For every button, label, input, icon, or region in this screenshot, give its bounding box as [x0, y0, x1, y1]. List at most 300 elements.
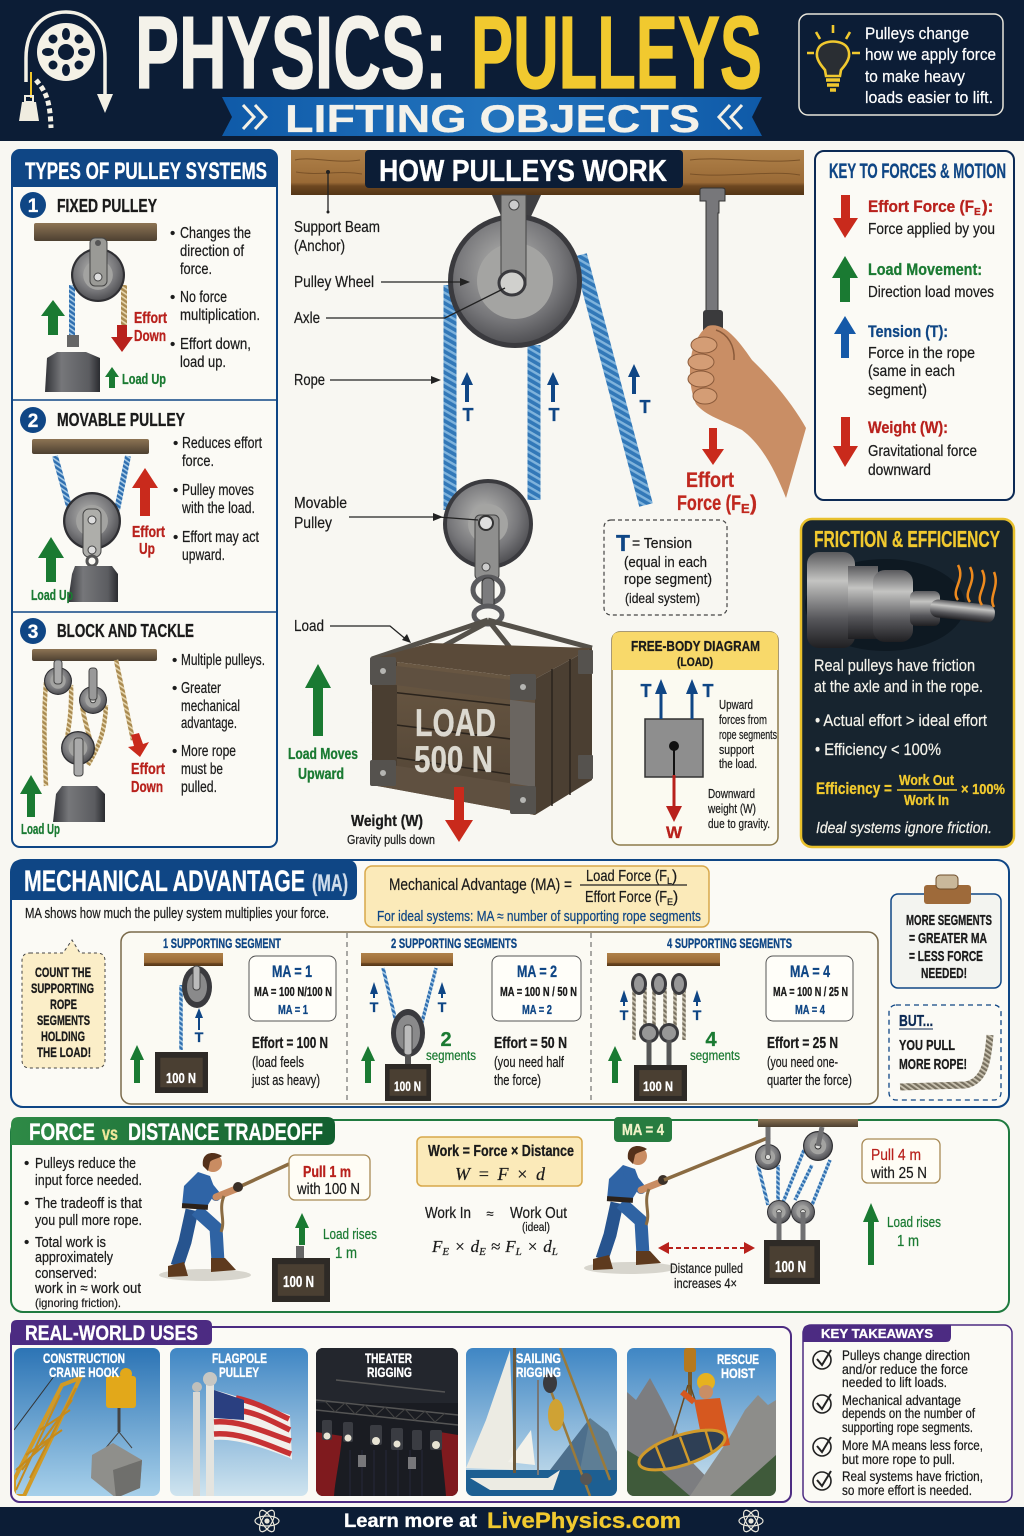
takeaway 1: needed to lift loads. [842, 1375, 947, 1390]
work in equals work out: Work In [425, 1205, 471, 1222]
efficiency formula [816, 772, 1005, 809]
work in equals work out: × [527, 1237, 538, 1256]
callout: pulleys change force: how we apply force [865, 45, 996, 64]
bullet list: work in ≈ work out [34, 1280, 142, 1297]
distance arrow: Distance pulled [670, 1261, 743, 1276]
bullet list: approximately [35, 1249, 113, 1266]
count callout: ROPE [50, 996, 77, 1012]
crate load: LOAD [415, 702, 496, 745]
photo: theater rigging [316, 1348, 458, 1496]
tension note [604, 520, 727, 615]
icon: atom left [255, 1508, 279, 1534]
example: 2 supporting segments: T [370, 999, 379, 1015]
effort force [677, 428, 757, 516]
pull 1 m callout: with 100 N [296, 1181, 360, 1198]
footer text: LivePhysics.com [487, 1508, 681, 1533]
example: 4 supporting segments: Effort = 25 N [767, 1035, 838, 1052]
photo: construction crane: CRANE HOOK [49, 1364, 119, 1380]
fixed pulley: Effort down, [180, 336, 251, 353]
free-body diagram: rope segments [719, 728, 777, 742]
example: 1 supporting segment: MA = 1 [272, 962, 312, 981]
example: 1 supporting segment: 100 N [166, 1070, 196, 1087]
block and tackle: More rope [181, 743, 236, 760]
pulley wheel [448, 195, 582, 348]
takeaway 4: so more effort is needed. [842, 1483, 972, 1498]
formula box: ) [673, 889, 678, 906]
free-body diagram: Downward [708, 787, 755, 801]
labels with leader lines [294, 170, 505, 643]
free-body diagram: weight (W) [707, 802, 756, 816]
example: 2 supporting segments [361, 935, 581, 1101]
work in equals work out [425, 1205, 567, 1258]
footer text: Learn more at [344, 1511, 478, 1532]
work in equals work out: ≈ [486, 1206, 494, 1221]
tension key: (same in each [868, 363, 955, 380]
work in equals work out: F [432, 1237, 442, 1256]
heading: how pulleys work: HOW PULLEYS WORK [379, 153, 668, 188]
heading: force vs distance [11, 1117, 335, 1146]
photo: theater rigging: THEATER [365, 1350, 412, 1366]
fixed pulley: multiplication. [180, 307, 260, 324]
hand pulling handle [688, 188, 806, 498]
load moves upward: Upward [298, 766, 344, 783]
effort force key: Force applied by you [868, 221, 995, 238]
heading: mechanical advantage: MECHANICAL ADVANTAGE [24, 865, 305, 898]
load rises 1 m: Load rises [323, 1226, 377, 1243]
example: 2 supporting segments: 2 SUPPORTING SEGMENTS [391, 935, 517, 951]
block and tackle: 3 [28, 622, 38, 643]
work in equals work out: L [515, 1246, 522, 1258]
example: 4 supporting segments: MA = 4 [790, 962, 830, 981]
free-body diagram: T [702, 681, 714, 701]
block and tackle: • [172, 680, 177, 697]
fixed pulley: Down [134, 328, 166, 345]
distance arrow [658, 1242, 755, 1291]
example: 1 supporting segment: MA = 1 [278, 1002, 308, 1017]
labels with leader lines: Pulley Wheel [294, 274, 374, 291]
block and tackle [20, 618, 265, 838]
fixed pulley: Changes the [180, 225, 251, 242]
photo: sailing rigging [466, 1348, 617, 1496]
load movement key: Direction load moves [868, 284, 994, 301]
movable pulley: • [173, 435, 178, 452]
example: 2 supporting segments: (you need half [494, 1055, 565, 1071]
formula box: Effort Force (F [585, 889, 667, 906]
takeaway 1: and/or reduce the force [842, 1362, 968, 1377]
tension note: T [616, 530, 630, 556]
man pulling block and tackle: 100 N [775, 1259, 806, 1276]
formula box: Load Force (F [586, 868, 667, 885]
photo: flagpole: PULLEY [219, 1364, 259, 1380]
fixed pulley [20, 192, 260, 392]
count callout: HOLDING [41, 1028, 85, 1044]
fixed pulley: force. [180, 261, 212, 278]
footer text [344, 1508, 681, 1533]
example: 4 supporting segments: segments [690, 1048, 740, 1063]
tension note: (ideal system) [625, 590, 700, 606]
bullet list: • [24, 1234, 29, 1251]
example: 1 supporting segment: (load feels [252, 1055, 304, 1071]
example: 2 supporting segments: Effort = 50 N [494, 1035, 567, 1052]
free-body diagram: support [719, 743, 754, 757]
work in equals work out: d [471, 1237, 480, 1256]
panel: friction and efficiency: Real pulleys have friction [814, 656, 975, 675]
work in equals work out: E [441, 1246, 449, 1258]
efficiency formula: Work In [904, 792, 949, 809]
photo: flagpole [170, 1348, 308, 1496]
photo: sailing rigging: SAILING [516, 1350, 561, 1366]
effort force: E [741, 501, 750, 516]
load rises right [863, 1203, 941, 1265]
block and tackle: Multiple pulleys. [181, 652, 265, 669]
panel: mechanical advantage [11, 860, 1009, 1107]
formula box [365, 866, 709, 927]
example: 1 supporting segment: MA = 100 N/100 N [254, 984, 332, 999]
heading: force vs distance: vs [102, 1124, 118, 1145]
tag: MA = 4 [614, 1117, 672, 1142]
example: 4 supporting segments: 4 SUPPORTING SEGMENTS [667, 935, 792, 951]
note: but you pull more rope: BUT... [899, 1013, 933, 1030]
count callout [22, 940, 105, 1068]
support beam [291, 150, 804, 195]
man pulling rope: 1 m [159, 1153, 289, 1281]
effort force key [833, 195, 995, 238]
efficiency formula: Work Out [899, 772, 954, 789]
example: 4 supporting segments: (you need one- [767, 1055, 838, 1071]
example: 2 supporting segments: MA = 2 [522, 1002, 552, 1017]
tension key: segment) [868, 382, 927, 399]
count callout: THE LOAD! [37, 1044, 91, 1060]
example: 4 supporting segments: MA = 100 N / 25 N [773, 984, 848, 999]
formula box: E [667, 897, 673, 907]
photo: construction crane [14, 1348, 160, 1498]
pull 4 m callout: with 25 N [870, 1165, 927, 1182]
callout: pulleys change force: to make heavy [865, 67, 965, 86]
icon: light bulb [807, 25, 860, 90]
callout: pulleys change force: loads easier to lift. [865, 88, 993, 107]
formula box: Mechanical Advantage (MA) = [389, 876, 572, 894]
movable pulley: Pulley moves [182, 482, 254, 499]
movable pulley: force. [182, 453, 214, 470]
example: 2 supporting segments: T [438, 999, 447, 1015]
efficiency formula: × 100% [961, 781, 1005, 798]
free-body diagram: Upward [719, 698, 753, 712]
example: 2 supporting segments: 2 [440, 1029, 452, 1051]
takeaway 3: but more rope to pull. [842, 1452, 955, 1467]
callout: pulleys change force [799, 14, 1003, 115]
free-body diagram: (LOAD) [677, 655, 713, 669]
pull 4 m callout [862, 1139, 940, 1183]
load moves upward [288, 664, 358, 783]
block and tackle: BLOCK AND TACKLE [57, 621, 194, 641]
free-body diagram: T [640, 681, 652, 701]
photo: flagpole: FLAGPOLE [212, 1350, 267, 1366]
heading: real-world uses: REAL-WORLD USES [25, 1322, 198, 1345]
work in equals work out: ≈ [491, 1237, 500, 1256]
effort force: Effort [686, 469, 734, 492]
load rises 1 m [272, 1213, 377, 1302]
fixed pulley: • [170, 336, 175, 353]
block and tackle: mechanical [181, 698, 240, 715]
clipboard note: = LESS FORCE [909, 949, 983, 965]
movable pulley [443, 479, 533, 624]
pull 1 m callout: Pull 1 m [303, 1164, 351, 1181]
labels with leader lines: Movable [294, 495, 347, 512]
bullet list: The tradeoff is that [35, 1195, 143, 1212]
subtitle ribbon [222, 97, 762, 141]
bullet list: • [24, 1155, 29, 1172]
bullet list: Pulleys reduce the [35, 1155, 136, 1172]
example: 2 supporting segments: 100 N [394, 1078, 421, 1094]
example: 4 supporting segments: T [620, 1007, 629, 1023]
example: 2 supporting segments: segments [426, 1048, 476, 1063]
bullet list: you pull more rope. [35, 1212, 142, 1229]
panel: force vs distance tradeoff [11, 1117, 1009, 1312]
fixed pulley: Load Up [122, 371, 166, 388]
pull 4 m callout: Pull 4 m [871, 1147, 921, 1164]
movable pulley: MOVABLE PULLEY [57, 410, 185, 430]
work in equals work out: (ideal) [522, 1222, 550, 1234]
photo: theater rigging: RIGGING [367, 1364, 412, 1380]
takeaway 2: supporting rope segments. [842, 1420, 973, 1435]
effort force: ) [750, 492, 757, 515]
weight key [833, 417, 977, 479]
icon: atom right [739, 1508, 763, 1534]
movable pulley: upward. [182, 547, 225, 564]
bullet list: conserved: [35, 1265, 97, 1282]
movable pulley: Load Up [31, 587, 73, 604]
panel: friction and efficiency: • Actual effort > ideal effort [815, 711, 987, 730]
bullet list: • [24, 1195, 29, 1212]
work in equals work out: Work Out [510, 1205, 567, 1222]
rope [450, 255, 646, 510]
labels with leader lines: Axle [294, 310, 320, 327]
panel: friction and efficiency: Ideal systems ignore friction. [816, 820, 992, 837]
heading: types of pulley systems [12, 150, 277, 187]
movable pulley: Up [139, 541, 155, 558]
fixed pulley: load up. [180, 354, 226, 371]
movable pulley: with the load. [181, 500, 255, 517]
work in equals work out: d [543, 1237, 552, 1256]
weight arrow and label: Gravity pulls down [347, 832, 435, 847]
icon: pulley logo [19, 12, 113, 128]
weight key: downward [868, 462, 931, 479]
block and tackle: Load Up [21, 821, 60, 838]
formula box: ) [672, 868, 677, 885]
load rises 1 m: 1 m [335, 1245, 357, 1262]
weight arrow and label: Weight (W) [351, 813, 423, 830]
example: 4 supporting segments [607, 935, 853, 1101]
labels with leader lines: (Anchor) [294, 238, 345, 255]
block and tackle: Greater [181, 680, 221, 697]
movable pulley: • [173, 529, 178, 546]
example: 4 supporting segments: MA = 4 [795, 1002, 826, 1017]
labels with leader lines: Rope [294, 372, 325, 389]
panel: friction and efficiency: at the axle and in the rope. [814, 677, 983, 696]
count callout: SUPPORTING [31, 980, 94, 996]
example: 1 supporting segment: 1 SUPPORTING SEGMENT [163, 935, 281, 951]
work in equals work out: E [478, 1246, 486, 1258]
free-body diagram: forces from [719, 713, 767, 727]
photo: sailing rigging: RIGGING [516, 1364, 561, 1380]
tension note: (equal in each [624, 554, 707, 571]
heading: key takeaways: KEY TAKEAWAYS [821, 1326, 933, 1341]
subtitle ribbon: LIFTING OBJECTS [285, 98, 700, 141]
fixed pulley: FIXED PULLEY [57, 196, 157, 216]
example: 4 supporting segments: 100 N [643, 1078, 673, 1094]
takeaway 4 [813, 1469, 983, 1498]
takeaway 3: More MA means less force, [842, 1438, 983, 1453]
count callout: COUNT THE [35, 964, 91, 980]
load movement key: Load Movement: [868, 260, 982, 279]
icon: axle with heat [805, 552, 996, 651]
tension note: = Tension [632, 535, 692, 552]
block and tackle: must be [181, 761, 223, 778]
tension note: rope segment) [624, 571, 712, 588]
effort force key: E [974, 207, 981, 218]
note: but you pull more rope [889, 1005, 1001, 1100]
movable pulley: • [173, 482, 178, 499]
fixed pulley: direction of [180, 243, 245, 260]
callout: pulleys change force: Pulleys change [865, 24, 969, 43]
fixed pulley: • [170, 289, 175, 306]
bullet list [24, 1155, 143, 1310]
takeaway 2: Mechanical advantage [842, 1393, 961, 1408]
distance arrow: increases 4× [674, 1276, 737, 1291]
fixed pulley: Effort [134, 310, 168, 327]
panel: types of pulley systems [12, 150, 277, 847]
block and tackle: advantage. [181, 715, 237, 732]
takeaway 2 [813, 1393, 975, 1435]
labels with leader lines: Load [294, 618, 324, 635]
load rises right: 1 m [897, 1233, 919, 1250]
labels with leader lines: Support Beam [294, 219, 380, 236]
tension arrows: T [640, 397, 650, 417]
takeaway 2: depends on the number of [842, 1406, 975, 1421]
clipboard note [891, 875, 1001, 988]
photo: rescue hoist [627, 1348, 776, 1496]
panel: how pulleys work [288, 150, 806, 847]
work formula box [417, 1137, 582, 1186]
photo: rescue hoist: HOIST [721, 1365, 755, 1381]
effort force key: ): [982, 197, 993, 216]
free-body diagram: due to gravity. [708, 817, 770, 831]
count callout: SEGMENTS [37, 1012, 90, 1028]
formula box: For ideal systems: MA ≈ number of supporting rope segments [377, 909, 701, 925]
heading: force vs distance: DISTANCE TRADEOFF [128, 1119, 323, 1146]
work formula box: Work = Force × Distance [428, 1143, 574, 1160]
tag: MA = 4: MA = 4 [622, 1122, 664, 1139]
footer [0, 1507, 1024, 1536]
takeaway 1 [813, 1348, 970, 1390]
takeaway 3 [813, 1437, 983, 1467]
example: 1 supporting segment: just as heavy) [251, 1073, 320, 1089]
heading: mechanical advantage: (MA) [312, 870, 348, 897]
crate load [370, 620, 593, 815]
heading: key takeaways [803, 1325, 951, 1342]
block and tackle: • [172, 652, 177, 669]
photo: construction crane: CONSTRUCTION [43, 1350, 125, 1366]
example: 2 supporting segments: MA = 100 N / 50 N [500, 984, 577, 999]
load moves upward: Load Moves [288, 746, 358, 763]
example: 1 supporting segment: T [195, 1029, 204, 1045]
movable pulley: 2 [28, 411, 38, 432]
weight key: Gravitational force [868, 443, 977, 460]
heading: mechanical advantage [11, 860, 357, 900]
movable pulley [20, 407, 263, 604]
efficiency formula: Efficiency = [816, 779, 892, 798]
movable pulley: Reduces effort [182, 435, 263, 452]
example: 2 supporting segments: MA = 2 [517, 962, 557, 981]
bullet list: Total work is [35, 1234, 106, 1251]
pull 1 m callout [289, 1155, 370, 1200]
example: 4 supporting segments: 4 [705, 1029, 717, 1051]
free-body diagram [612, 632, 778, 845]
load rises 1 m: 100 N [283, 1274, 314, 1291]
panel: friction and efficiency [801, 519, 1014, 847]
note: but you pull more rope: MORE ROPE! [899, 1056, 967, 1073]
block and tackle: Effort [131, 761, 166, 778]
examples frame [121, 932, 878, 1104]
fixed pulley: No force [180, 289, 227, 306]
photo: rescue hoist: RESCUE [717, 1351, 759, 1367]
panel: real-world uses [11, 1320, 791, 1502]
panel: key to forces and motion [815, 151, 1014, 500]
load rises right: Load rises [887, 1214, 941, 1231]
clipboard note: = GREATER MA [909, 931, 987, 947]
heading: force vs distance: FORCE [29, 1119, 95, 1146]
clipboard note: NEEDED! [921, 966, 967, 982]
free-body diagram: the load. [719, 757, 757, 771]
takeaway 1: Pulleys change direction [842, 1348, 970, 1363]
effort force: Force (F [677, 492, 741, 515]
free-body diagram: W [666, 823, 683, 842]
movable pulley: Effort [132, 524, 166, 541]
example: 1 supporting segment [130, 935, 336, 1093]
work formula box: W = F × d [455, 1164, 546, 1184]
heading: types of pulley systems: TYPES OF PULLEY SYSTEMS [25, 158, 267, 185]
note: but you pull more rope: YOU PULL [899, 1037, 955, 1054]
tension key [834, 316, 975, 399]
panel: key takeaways [803, 1325, 1012, 1502]
tension arrows [461, 364, 650, 425]
tension key: Force in the rope [868, 345, 975, 362]
fixed pulley: • [170, 225, 175, 242]
effort force key: Effort Force (F [868, 197, 974, 216]
block and tackle: Down [131, 779, 163, 796]
work in equals work out: L [551, 1246, 558, 1258]
movable pulley: Effort may act [182, 529, 260, 546]
takeaway 4: Real systems have friction, [842, 1469, 983, 1484]
block and tackle: • [172, 743, 177, 760]
fixed pulley: 1 [28, 196, 39, 217]
example: 4 supporting segments: quarter the force) [767, 1073, 852, 1089]
header banner [0, 0, 1024, 141]
tension arrows: T [462, 405, 474, 425]
block and tackle: pulled. [181, 779, 217, 796]
work in equals work out: × [454, 1237, 466, 1256]
crate load: 500 N [414, 739, 493, 780]
tension arrows: T [548, 405, 560, 425]
bullet list: (ignoring friction). [35, 1296, 121, 1310]
example: 4 supporting segments: T [693, 1007, 702, 1023]
man pulling block and tackle [584, 1119, 858, 1284]
formula box: L [667, 876, 672, 886]
tension key: Tension (T): [868, 322, 948, 341]
work in equals work out: F [504, 1237, 516, 1256]
example: 1 supporting segment: Effort = 100 N [252, 1035, 328, 1052]
panel: mechanical advantage: MA shows how much the pulley system multiplies your force. [25, 906, 329, 922]
